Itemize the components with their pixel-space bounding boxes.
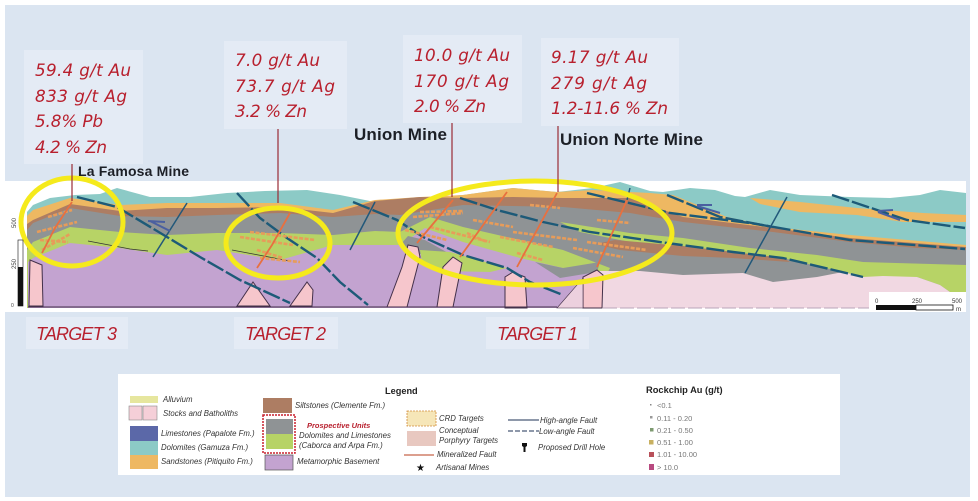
legend column 3: ★	[416, 463, 425, 474]
callout: Target 2 assays	[224, 41, 347, 129]
callout: Union Mine assays: 10.0 g/t Au	[414, 45, 510, 65]
legend column 3: CRD Targets	[439, 414, 484, 423]
layer: lower green wedge	[420, 250, 507, 272]
legend column 3: Artisanal Mines	[435, 463, 489, 472]
legend: rockchip scale: 1.01 - 10.00	[657, 450, 697, 459]
layer: green dolomites left	[27, 217, 610, 308]
callout: Union Mine assays	[403, 35, 522, 123]
legend column 3	[404, 411, 498, 474]
callout: Union Mine assays: 170 g/t Ag	[414, 71, 509, 91]
legend: rockchip scale	[646, 385, 723, 472]
legend column 1	[129, 395, 255, 469]
yellow ellipses	[21, 178, 672, 285]
bottom line of section	[28, 306, 557, 308]
legend: rockchip scale: <0.1	[657, 401, 672, 410]
legend column 3: Porphyry Targets	[439, 436, 498, 445]
layer: lower brown band	[595, 240, 790, 262]
legend column 3: Mineralized Fault	[437, 450, 497, 459]
label: Target 1: TARGET 1	[497, 324, 578, 344]
label: La Famosa Mine: La Famosa Mine	[78, 163, 189, 179]
callout: La Famosa assays	[24, 50, 143, 164]
scale bar: m	[956, 307, 961, 313]
callout leader lines	[72, 123, 558, 203]
label: Target 2	[234, 317, 338, 349]
callout: Union Norte assays	[541, 38, 679, 126]
legend column 4: faults and drill hole: Proposed Drill Hole	[538, 443, 606, 452]
basement contact lines	[88, 241, 290, 261]
legend column 1: Dolomites (Gamuza Fm.)	[161, 443, 248, 452]
callout: La Famosa assays: 833 g/t Ag	[35, 86, 127, 106]
label: Target 1	[486, 317, 589, 349]
layer: upper orange band right	[750, 198, 966, 222]
panel: geological cross-section	[5, 178, 966, 313]
legend title: Legend	[385, 386, 418, 396]
label: Target 3	[26, 317, 128, 349]
depth scale	[11, 217, 23, 309]
layer: pink batholith right	[557, 271, 966, 308]
scale bar: 250	[912, 299, 923, 305]
legend column 4: faults and drill hole: High-angle Fault	[540, 416, 598, 425]
legend column 4: faults and drill hole	[508, 416, 606, 452]
callout: Union Norte assays: 9.17 g/t Au	[551, 47, 648, 67]
legend: rockchip scale: Rockchip Au (g/t)	[646, 385, 723, 395]
callout: La Famosa assays: 5.8% Pb	[35, 111, 103, 131]
callout: Target 2 assays: 7.0 g/t Au	[235, 50, 320, 70]
legend: rockchip scale: > 10.0	[657, 463, 678, 472]
callout: Union Mine assays: 2.0 % Zn	[414, 96, 486, 116]
label: Target 3: TARGET 3	[36, 324, 117, 344]
layer: purple metamorphic basement	[28, 228, 600, 308]
legend column 2: Dolomites and Limestones	[299, 431, 391, 440]
depth scale: 500	[12, 217, 18, 228]
legend: rockchip scale: 0.51 - 1.00	[657, 438, 693, 447]
fault arrows	[148, 205, 900, 231]
scale bar: 500	[952, 299, 963, 305]
callout: Target 2 assays: 73.7 g/t Ag	[235, 76, 335, 96]
legend column 2	[263, 398, 391, 470]
stocks and batholiths	[29, 245, 603, 308]
legend column 1: Alluvium	[162, 395, 193, 404]
label: Target 2: TARGET 2	[245, 324, 326, 344]
legend column 2: Prospective Units	[307, 421, 370, 430]
lighter stock flank	[557, 278, 583, 308]
legend: rockchip scale: 0.21 - 0.50	[657, 426, 693, 435]
callout: Target 2 assays: 3.2 % Zn	[235, 101, 307, 121]
callout: Union Norte assays: 279 g/t Ag	[551, 73, 647, 93]
legend column 1: Stocks and Batholiths	[163, 409, 238, 418]
faults: high-angle	[153, 188, 787, 273]
layer: lower grey wedge at stock	[535, 262, 600, 278]
layer: grey dolomites and limestones	[27, 205, 966, 306]
layer: lower grey wedge	[400, 236, 450, 254]
mineralized faults: main veins	[42, 192, 627, 268]
scale bar: 0	[875, 299, 879, 305]
panel: legend	[118, 374, 840, 475]
faults: low-angle	[77, 193, 965, 305]
legend column 4: faults and drill hole: Low-angle Fault	[539, 427, 595, 436]
layer: green upper plate	[560, 222, 966, 292]
layer: brown siltstones	[27, 197, 966, 306]
mineralized zones: targets	[37, 205, 647, 262]
legend column 1: Limestones (Papalote Fm.)	[161, 429, 255, 438]
callout: La Famosa assays: 4.2 % Zn	[35, 137, 107, 157]
label: Union Mine: Union Mine	[354, 125, 447, 144]
label: Union Norte Mine: Union Norte Mine	[560, 130, 703, 149]
scale bar	[869, 292, 966, 313]
layer: teal dolomites	[27, 182, 966, 306]
legend column 2: Siltstones (Clemente Fm.)	[295, 401, 386, 410]
legend column 2: (Caborca and Arpa Fm.)	[299, 441, 383, 450]
legend: rockchip scale: 0.11 - 0.20	[657, 414, 692, 423]
legend column 1: Sandstones (Pitiquito Fm.)	[161, 457, 253, 466]
depth scale: 250	[12, 258, 18, 269]
callout: La Famosa assays: 59.4 g/t Au	[35, 60, 131, 80]
depth scale: 0	[11, 303, 14, 309]
legend column 2: Metamorphic Basement	[297, 457, 380, 466]
legend column 3: Conceptual	[439, 426, 479, 435]
layer: orange sandstones	[27, 188, 966, 306]
callout: Union Norte assays: 1.2-11.6 % Zn	[551, 98, 668, 118]
